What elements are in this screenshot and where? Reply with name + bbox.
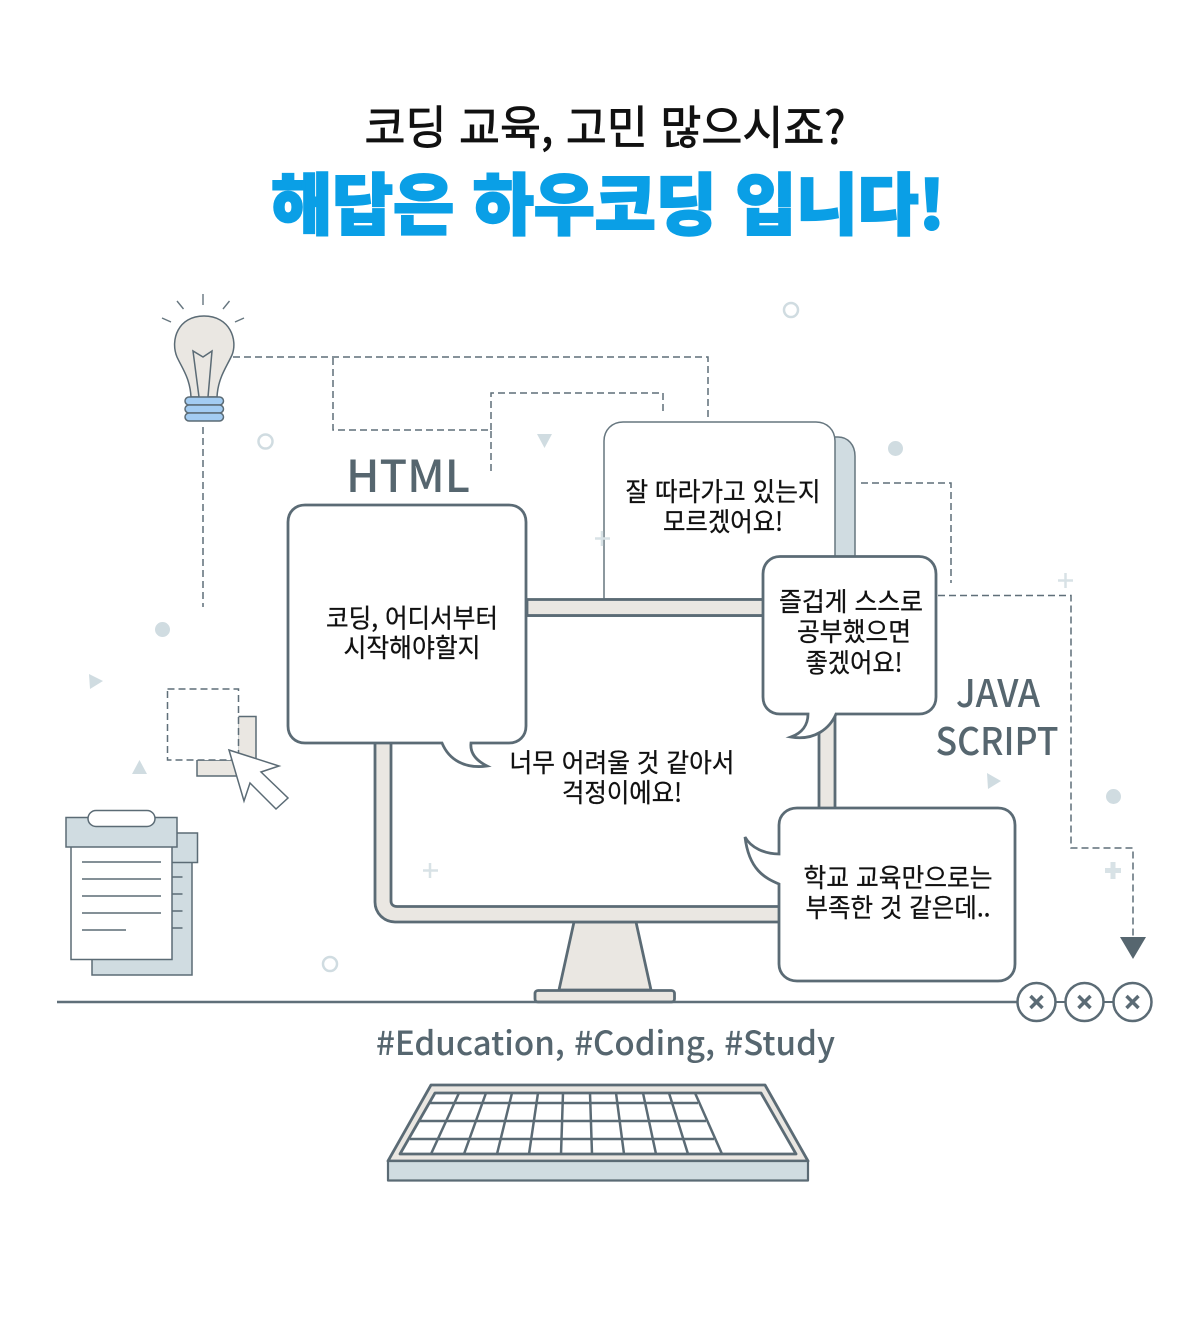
keyboard xyxy=(388,1085,808,1180)
screen text xyxy=(510,743,734,810)
title: question heading: 코딩 교육, 고민 많으시죠? xyxy=(364,92,846,158)
label: HTML: HTML xyxy=(346,441,470,505)
speech card: top right: 모르겠어요! xyxy=(663,502,783,539)
monitor frame xyxy=(375,600,835,922)
monitor xyxy=(375,600,835,1002)
arrow head xyxy=(1120,937,1146,959)
label: JAVA SCRIPT: SCRIPT xyxy=(936,711,1058,766)
speech bubble: HTML: 코딩, 어디서부터 xyxy=(326,598,498,636)
dashed connector lines xyxy=(203,357,1133,937)
monitor stand xyxy=(559,922,651,990)
speech bubble: bottom right: 부족한 것 같은데.. xyxy=(806,888,990,925)
ground line xyxy=(57,1001,1017,1003)
screen text: 걱정이에요! xyxy=(562,773,682,810)
screen text: 너무 어려울 것 같아서 xyxy=(510,743,734,780)
speech bubble: right: 좋겠어요! xyxy=(806,643,902,680)
keyboard keys xyxy=(400,1093,796,1154)
speech bubble: right: 즐겁게 스스로 xyxy=(779,582,923,619)
speech bubble: HTML: 시작해야할지 xyxy=(344,628,480,665)
speech card: top right xyxy=(527,422,855,616)
speech bubble: right: 공부했으면 xyxy=(797,612,911,649)
decorative shapes: circles, triangles, plus signs xyxy=(89,303,1121,971)
speech bubble: bottom right xyxy=(745,808,1015,981)
window buttons xyxy=(1018,983,1152,1021)
speech bubble: bottom right: 학교 교육만으로는 xyxy=(804,858,992,895)
hashtags: #Education, #Coding, #Study xyxy=(376,1017,835,1065)
label: JAVA SCRIPT xyxy=(936,663,1058,766)
keyboard base xyxy=(388,1085,808,1161)
title: blue answer heading: 해답은 하우코딩 입니다! xyxy=(271,152,945,249)
speech bubble: HTML xyxy=(288,505,526,767)
icon: clipboard xyxy=(66,810,198,975)
plus on screen xyxy=(423,863,438,878)
icon: light bulb xyxy=(162,294,244,421)
icon: selection box and cursor xyxy=(168,689,288,809)
label: JAVA SCRIPT: JAVA xyxy=(956,663,1040,718)
speech card: top right: 잘 따라가고 있는지 xyxy=(626,472,820,509)
speech bubble: right xyxy=(763,556,936,738)
